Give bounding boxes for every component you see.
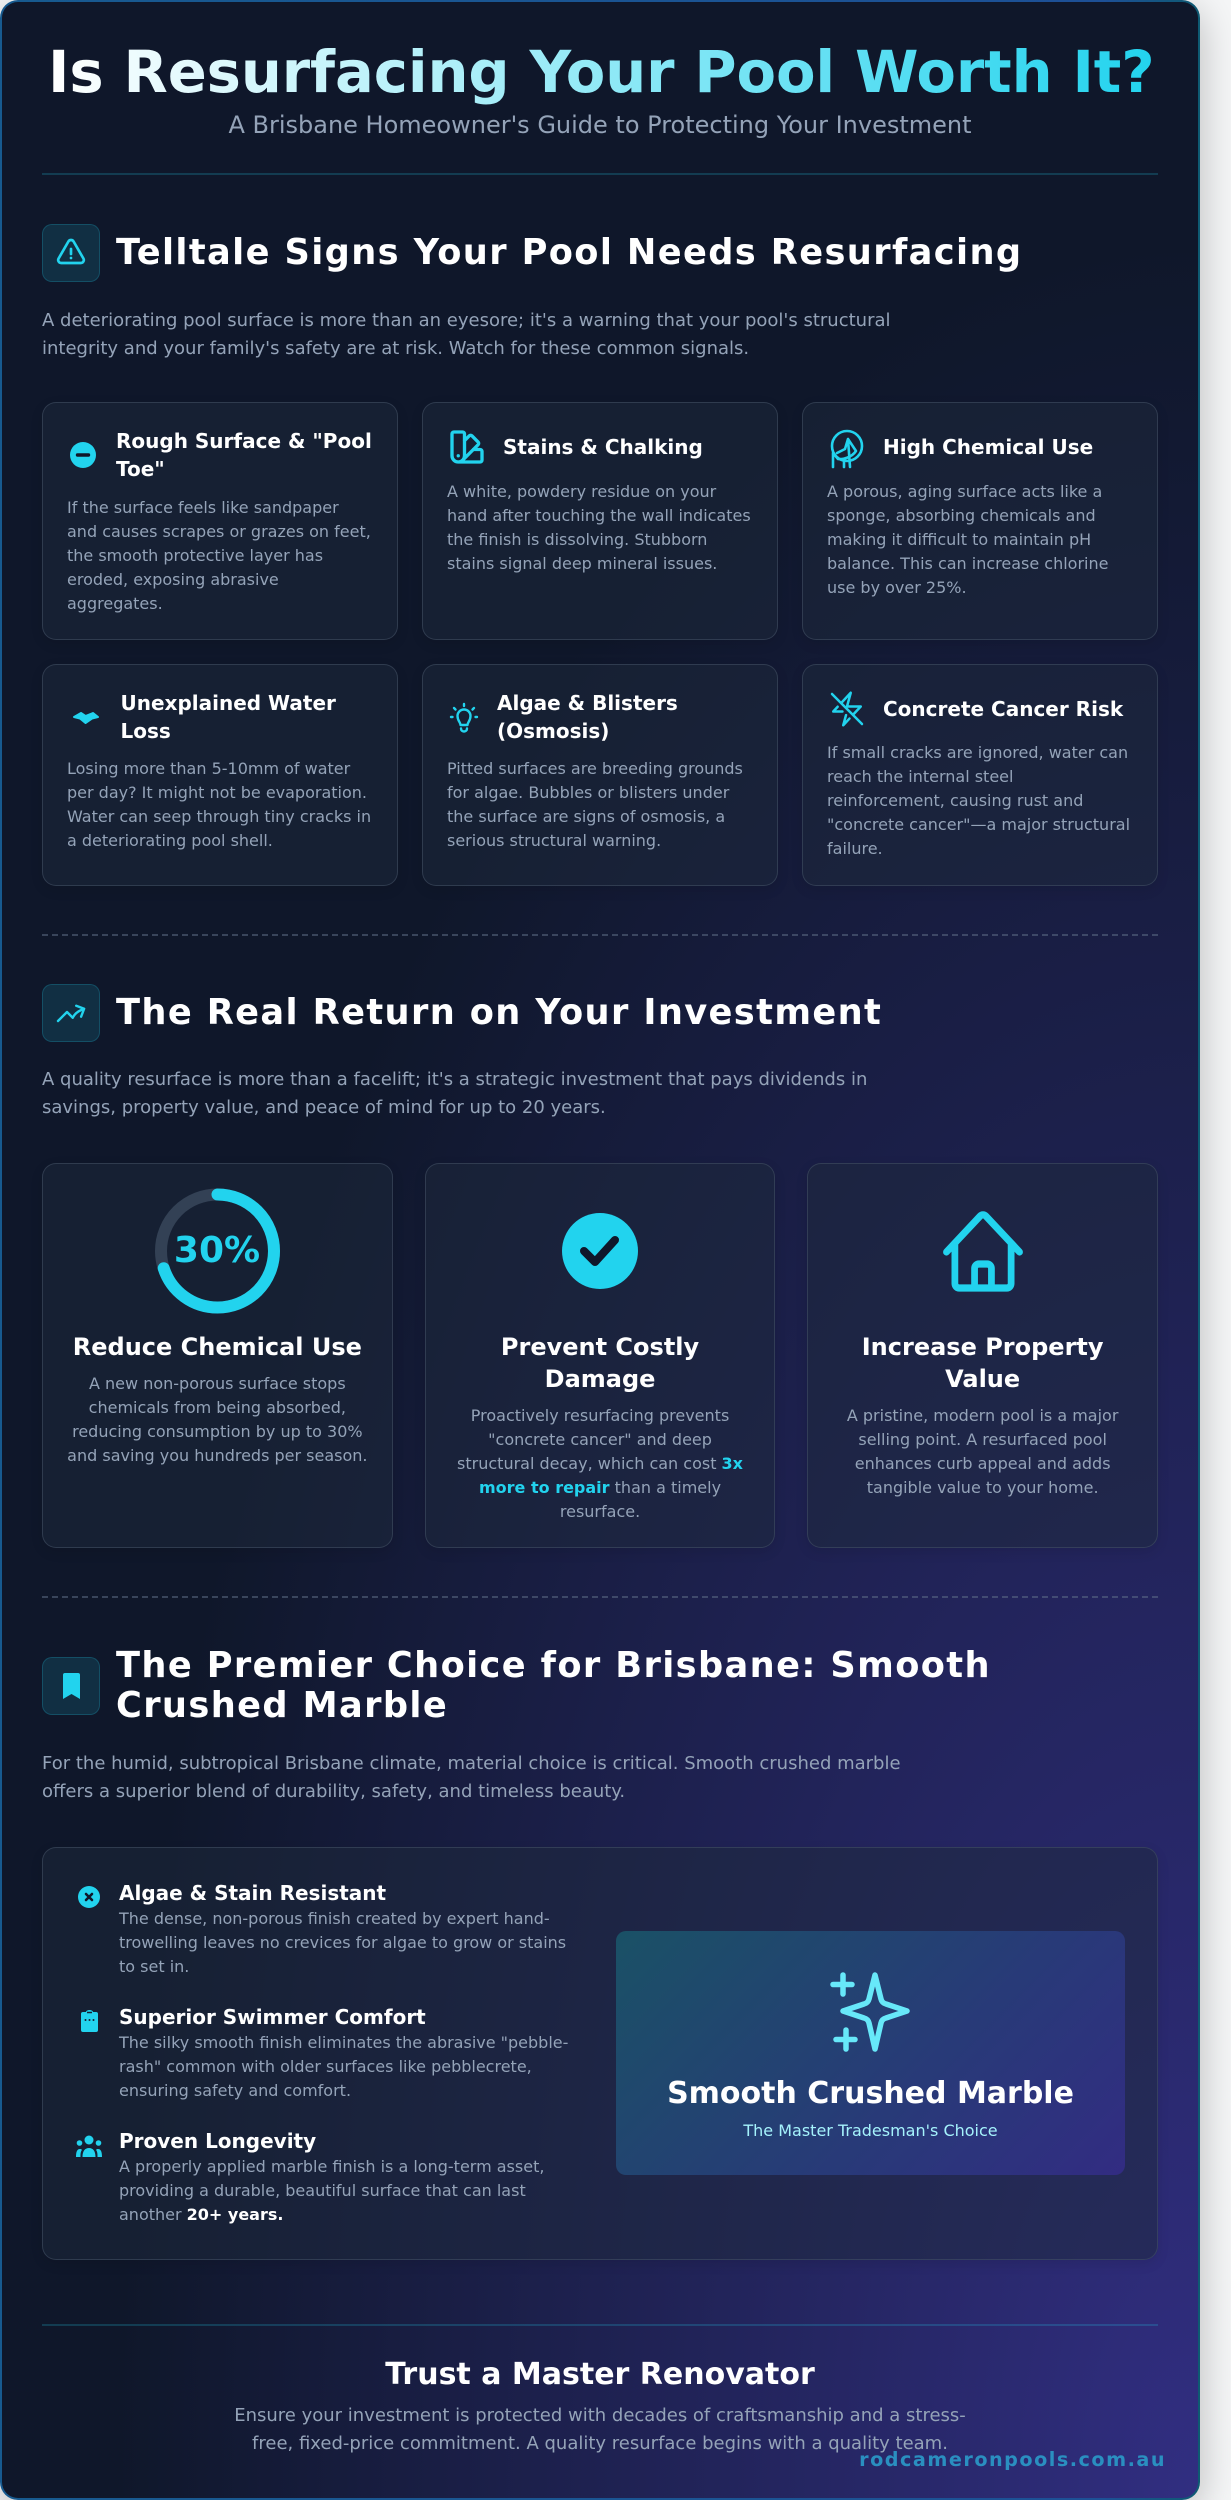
- heading: premier choice: Crushed Marble: [116, 1685, 448, 1726]
- panel: water loss: [42, 664, 398, 886]
- card title: Unexplained Water: [120, 691, 336, 715]
- title: Is Resurfacing Your Pool Worth It?: [48, 39, 1155, 106]
- icon: trending up: [42, 984, 100, 1042]
- icon: house: [943, 1211, 1023, 1292]
- icon: warning triangle: [42, 224, 100, 282]
- card text: "concrete cancer"—a major structural: [827, 814, 1130, 834]
- heading: premier choice: [116, 1645, 991, 1726]
- card title: Stains & Chalking: [503, 435, 703, 459]
- card title: Prevent Costly: [501, 1333, 699, 1361]
- card text: Water can seep through tiny cracks in: [67, 806, 371, 826]
- card title: Concrete Cancer Risk: [883, 697, 1123, 721]
- panel: prevent costly damage: [425, 1162, 775, 1548]
- card text: the smooth protective layer has: [67, 546, 323, 564]
- heading: premier choice: The Premier Choice for Brisbane: Smooth: [116, 1645, 991, 1686]
- card text: stains signal deep mineral issues.: [447, 554, 717, 572]
- card title: Rough Surface & "Pool: [116, 429, 372, 453]
- card text: chemicals from being absorbed,: [89, 1398, 346, 1417]
- card text: a deteriorating pool shell.: [67, 830, 273, 850]
- card text: [447, 758, 743, 850]
- intro text: premier choice: offers a superior blend of durability, safety, and timeless beauty.: [42, 1781, 625, 1802]
- benefit text: The silky smooth finish eliminates the abrasive "pebble-: [119, 2033, 568, 2052]
- heading: telltale signs: Telltale Signs Your Pool Needs Resurfacing: [116, 232, 1022, 273]
- card text: [827, 482, 1108, 596]
- benefit title: Superior Swimmer Comfort: [119, 2005, 426, 2029]
- panel: crushed marble benefits: [42, 1846, 1158, 2260]
- card text: serious structural warning.: [447, 830, 661, 850]
- card text: [457, 1406, 743, 1521]
- icon: sparkles: [830, 1972, 910, 2052]
- intro text: premier choice: [42, 1753, 901, 1802]
- callout title: Smooth Crushed Marble: [667, 2076, 1074, 2111]
- card text: making it difficult to maintain pH: [827, 530, 1091, 548]
- benefit text: A properly applied marble finish is a long-term asset,: [119, 2157, 544, 2176]
- card text: and causes scrapes or grazes on feet,: [67, 522, 371, 540]
- benefit text: providing a durable, beautiful surface that can last: [119, 2181, 526, 2200]
- card title: Value: [945, 1365, 1020, 1393]
- card text: sponge, absorbing chemicals and: [827, 506, 1096, 524]
- intro text: premier choice: For the humid, subtropical Brisbane climate, material choice is critical. Smooth crushed marble: [42, 1753, 901, 1774]
- card text: A porous, aging surface acts like a: [827, 482, 1102, 500]
- panel: algae and blisters: [422, 664, 778, 886]
- footer text: free, fixed-price commitment. A quality resurface begins with a quality team.: [252, 2432, 948, 2454]
- card text: use by over 25%.: [827, 578, 967, 596]
- card text: "concrete cancer" and deep: [488, 1430, 712, 1449]
- card text: A new non-porous surface stops: [89, 1374, 346, 1393]
- icon: check circle: [562, 1213, 638, 1289]
- card text: [847, 1406, 1118, 1497]
- card text: If the surface feels like sandpaper: [67, 498, 339, 516]
- callout: smooth crushed marble: [616, 1931, 1125, 2175]
- card text: aggregates.: [67, 594, 163, 612]
- card text: [67, 498, 371, 612]
- panel: increase property value: [807, 1162, 1158, 1548]
- benefit text: The dense, non-porous finish created by expert hand-: [119, 1909, 550, 1928]
- icon: bulb: [450, 702, 478, 733]
- card title: (Osmosis): [497, 719, 609, 743]
- icon: bookmark: [42, 1657, 100, 1715]
- card title: High Chemical Use: [883, 435, 1093, 459]
- card title: Loss: [120, 719, 171, 743]
- card text: resurface.: [560, 1502, 640, 1521]
- callout subtitle: The Master Tradesman's Choice: [743, 2120, 998, 2140]
- website link: rodcameronpools.com.au: [859, 2448, 1166, 2471]
- card text: and saving you hundreds per season.: [67, 1446, 368, 1465]
- card title: Algae & Blisters: [497, 691, 678, 715]
- intro text: return: [42, 1069, 867, 1118]
- chart: 30 percent ring: [155, 1188, 280, 1314]
- card text: the surface are signs of osmosis, a: [447, 806, 725, 826]
- card text: enhances curb appeal and adds: [855, 1454, 1111, 1473]
- card title: [862, 1333, 1104, 1393]
- card title: [116, 429, 372, 481]
- benefit text: another 20+ years.: [119, 2205, 283, 2224]
- icon: x circle: [78, 1886, 100, 1908]
- card text: hand after touching the wall indicates: [447, 506, 751, 524]
- card text: [67, 1374, 368, 1465]
- icon: clipboard: [81, 2010, 98, 2032]
- benefit text: [119, 2157, 544, 2224]
- card text: per day? It might not be evaporation.: [67, 782, 367, 802]
- footer heading: Trust a Master Renovator: [385, 2357, 815, 2392]
- intro text: return: savings, property value, and peace of mind for up to 20 years.: [42, 1097, 606, 1118]
- card text: structural decay, which can cost 3x: [457, 1454, 743, 1473]
- icon: minus circle: [70, 442, 96, 468]
- card text: tangible value to your home.: [867, 1478, 1099, 1497]
- intro text: return: A quality resurface is more than a facelift; it's a strategic investment that pays dividends in: [42, 1069, 867, 1090]
- card title: Increase Property: [862, 1333, 1104, 1361]
- card text: eroded, exposing abrasive: [67, 570, 279, 588]
- subtitle: A Brisbane Homeowner's Guide to Protecting Your Investment: [228, 111, 972, 139]
- panel: concrete cancer: [802, 664, 1158, 886]
- card text: [827, 742, 1130, 858]
- card text: A pristine, modern pool is a major: [847, 1406, 1118, 1425]
- card text: reinforcement, causing rust and: [827, 790, 1083, 810]
- panel: stains and chalking: [422, 402, 778, 640]
- footer text: [234, 2404, 966, 2454]
- card title: Damage: [545, 1365, 655, 1393]
- card text: If small cracks are ignored, water can: [827, 742, 1128, 762]
- card text: [447, 482, 751, 572]
- card text: A white, powdery residue on your: [447, 482, 716, 500]
- benefit title: Algae & Stain Resistant: [119, 1881, 386, 1905]
- icon: chemical: [830, 430, 864, 468]
- card text: reducing consumption by up to 30%: [72, 1422, 363, 1441]
- intro text: signs: integrity and your family's safety are at risk. Watch for these common signals.: [42, 338, 749, 359]
- benefit text: [118, 2033, 568, 2100]
- card text: Losing more than 5-10mm of water: [67, 758, 350, 778]
- panel: rough surface: [42, 402, 398, 640]
- intro text: signs: [42, 310, 891, 359]
- card title: [497, 691, 678, 743]
- card title: Reduce Chemical Use: [73, 1333, 362, 1361]
- footer text: Ensure your investment is protected with decades of craftsmanship and a stress-: [234, 2404, 966, 2426]
- card title: [501, 1333, 699, 1393]
- card text: balance. This can increase chlorine: [827, 554, 1108, 572]
- card title: Toe": [116, 457, 165, 481]
- card text: reach the internal steel: [827, 766, 1013, 786]
- heading: real return: The Real Return on Your Investment: [116, 992, 882, 1033]
- benefit text: to set in.: [119, 1957, 189, 1976]
- panel: high chemical use: [802, 402, 1158, 640]
- icon: swatch: [450, 430, 484, 464]
- icon: water ripple: [73, 712, 99, 724]
- icon: users: [76, 2136, 102, 2157]
- icon: bolt slash: [830, 691, 864, 726]
- benefit title: Proven Longevity: [119, 2129, 316, 2153]
- benefit text: [118, 1909, 566, 1976]
- card text: Proactively resurfacing prevents: [471, 1406, 729, 1425]
- benefit text: ensuring safety and comfort.: [119, 2081, 351, 2100]
- ring value: 30%: [174, 1230, 260, 1271]
- card text: Pitted surfaces are breeding grounds: [447, 758, 743, 778]
- card text: more to repair than a timely: [479, 1478, 721, 1497]
- benefit text: trowelling leaves no crevices for algae to grow or stains: [119, 1933, 566, 1952]
- card text: failure.: [827, 838, 883, 858]
- benefit text: rash" common with older surfaces like pebblecrete,: [119, 2057, 532, 2076]
- card text: [67, 758, 371, 850]
- card text: for algae. Bubbles or blisters under: [447, 782, 729, 802]
- intro text: signs: A deteriorating pool surface is more than an eyesore; it's a warning that your pool's structural: [42, 310, 891, 331]
- card text: the finish is dissolving. Stubborn: [447, 530, 707, 548]
- panel: reduce chemical use: [42, 1162, 393, 1548]
- card title: [120, 691, 336, 743]
- card text: selling point. A resurfaced pool: [858, 1430, 1107, 1449]
